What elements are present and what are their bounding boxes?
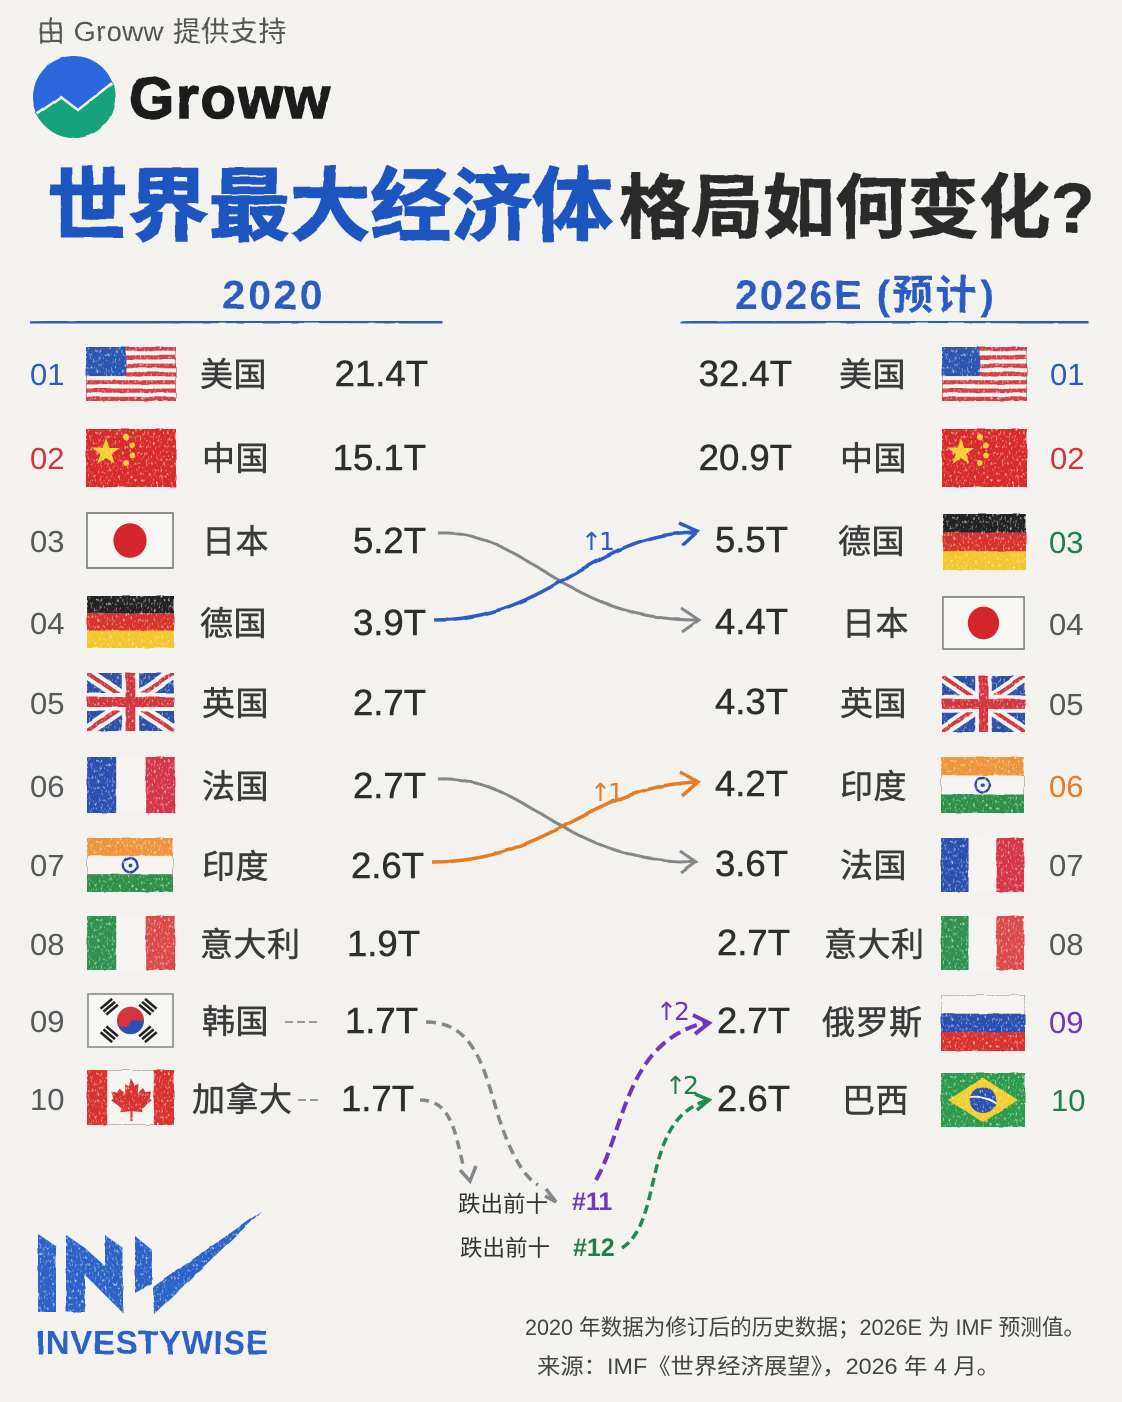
row: 01 US [30,347,428,401]
footnote line 2: 来源：IMF《世界经济展望》，2026 年 4 月。 [537,1354,1000,1379]
label: out of top ten, Canada: 跌出前十 [460,1236,550,1261]
title [47,162,1095,251]
arrow: Brazil up from 12 [622,1094,709,1248]
arrow: Russia up from 11 [596,1015,709,1180]
row: 08 Italy: 2.7T [717,922,790,963]
row: 10 Canada [30,1070,414,1125]
row: 03 Japan: 03 [30,524,64,559]
label: up 1 blue: ↑1 [581,527,613,556]
label: up 2 green: ↑2 [665,1071,697,1100]
row: 03 Germany: 德国 [838,523,905,560]
row: 09 Russia: 俄罗斯 [822,1004,922,1041]
row: 04 Japan: 4.4T [715,601,788,642]
row: 06 France: 2.7T [353,765,426,806]
row: 05 UK: 英国 [202,685,269,722]
row: 07 France: 法国 [840,847,907,884]
row: 10 Canada: 1.7T [341,1078,414,1119]
row: 09 Russia: 2.7T [717,1000,790,1041]
row: 07 India [30,838,424,892]
row: 06 India: 印度 [840,768,907,805]
row: 03 Germany: 03 [1049,525,1083,560]
row: 02 China [30,429,426,487]
row: 03 Germany: 5.5T [715,519,788,560]
row: 06 India: 4.2T [715,763,788,804]
row: 05 UK [715,676,1083,732]
row: 05 UK: 05 [30,686,64,721]
row: 02 China: 02 [1050,441,1084,476]
row: 10 Brazil: 2.6T [717,1078,790,1119]
row: 01 US: 21.4T [335,353,428,394]
label: up 1 orange: ↑1 [590,778,622,807]
panel: 2026E ranking [680,272,1088,1127]
label: out of top ten, Korea: 跌出前十 [458,1192,548,1217]
heading: 2026E: 2026E (预计) [735,272,996,318]
row: 01 US: 32.4T [699,353,792,394]
heading underline 2026E [680,321,1088,323]
row: 09 Korea: 1.7T [345,1000,418,1041]
row: 06 India [715,757,1083,813]
row: 01 US: 01 [30,357,64,392]
row: 05 UK: 05 [1049,687,1083,722]
row: 05 UK: 英国 [840,685,907,722]
arrow: Germany rise (blue) [434,523,697,620]
row: 03 Japan [30,513,426,568]
row: 04 Japan: 日本 [842,605,909,642]
row: 08 Italy: 08 [30,927,64,962]
row: 05 UK: 4.3T [715,681,788,722]
icon: INV mark [38,1211,262,1314]
row: 01 US: 01 [1050,357,1084,392]
row: 04 Germany [30,596,426,648]
row: 10 Canada: 加拿大 [192,1081,292,1118]
row: 02 China: 02 [30,441,64,476]
row: 02 China: 中国 [840,440,907,477]
row: 09 Korea: 09 [30,1004,64,1039]
arrow: Canada falls out [420,1100,476,1181]
logo: Groww [33,56,331,138]
heading underline 2020 [30,321,442,323]
row: 07 India: 印度 [202,848,269,885]
row: 03 Japan: 日本 [202,523,269,560]
title: dark part: 格局如何变化? [619,169,1095,247]
row: 06 France: 法国 [202,768,269,805]
row: 07 France [715,838,1083,892]
row: 01 US: 美国 [200,356,267,393]
wordmark: INVESTYWISE [36,1324,268,1361]
panel: 2020 ranking [30,272,442,1125]
row: 06 India: 06 [1049,769,1083,804]
row: 02 China [699,429,1084,487]
row: 10 Brazil [717,1073,1085,1127]
heading: 2020: 2020 [222,272,326,318]
label: #12: #12 [573,1234,615,1262]
row: 07 France: 07 [1049,848,1083,883]
row: 05 UK [30,673,426,731]
row: 04 Japan: 04 [1049,607,1083,642]
row: 10 Brazil: 10 [1051,1083,1085,1118]
arrow: France drop (grey) [438,779,696,873]
row: 04 Japan [715,597,1083,649]
row: 03 Japan: 5.2T [353,520,426,561]
row: 04 Germany: 3.9T [353,602,426,643]
row: 10 Brazil: 巴西 [842,1082,909,1119]
row: 08 Italy [30,916,420,970]
dashes: Korea [285,1021,318,1023]
row: 09 Korea: 韩国 [202,1003,269,1040]
row: 08 Italy: 1.9T [347,923,420,964]
icon: Groww circle [33,56,115,138]
row: 04 Germany: 德国 [200,605,267,642]
row: 01 US: 美国 [839,356,906,393]
row: 10 Canada: 10 [30,1082,64,1117]
row: 06 France: 06 [30,769,64,804]
dashes: Canada [298,1099,320,1101]
row: 08 Italy: 08 [1049,927,1083,962]
arrow: Japan drop (grey) [438,533,699,632]
footnote [525,1315,1085,1379]
logo: Investywise [36,1211,268,1361]
row: 08 Italy [717,916,1083,970]
title: blue part: 世界最大经济体 [47,162,613,251]
label: up 2 purple: ↑2 [656,997,688,1026]
row: 03 Germany [715,514,1083,570]
row: 08 Italy: 意大利 [824,926,924,963]
row: 09 Russia: 09 [1049,1005,1083,1040]
footnote line 1: 2020 年数据为修订后的历史数据；2026E 为 IMF 预测值。 [525,1315,1085,1340]
row: 06 France [30,757,426,813]
row: 07 India: 2.6T [351,845,424,886]
row: 05 UK: 2.7T [353,682,426,723]
Groww wordmark: Groww [129,66,331,131]
sponsor line: 由 Groww 提供支持 [37,16,287,47]
arrow: Korea falls out [426,1022,556,1202]
row: 09 Korea [30,994,418,1047]
row: 08 Italy: 意大利 [200,926,300,963]
row: 02 China: 20.9T [699,437,792,478]
row: 02 China: 15.1T [333,437,426,478]
row: 09 Russia [717,995,1083,1051]
row: 01 US [699,347,1084,401]
row: 07 France: 3.6T [715,843,788,884]
row: 04 Germany: 04 [30,606,64,641]
label: #11: #11 [572,1188,612,1216]
arrow: India rise (orange) [432,772,698,862]
row: 02 China: 中国 [202,440,269,477]
row: 07 India: 07 [30,848,64,883]
